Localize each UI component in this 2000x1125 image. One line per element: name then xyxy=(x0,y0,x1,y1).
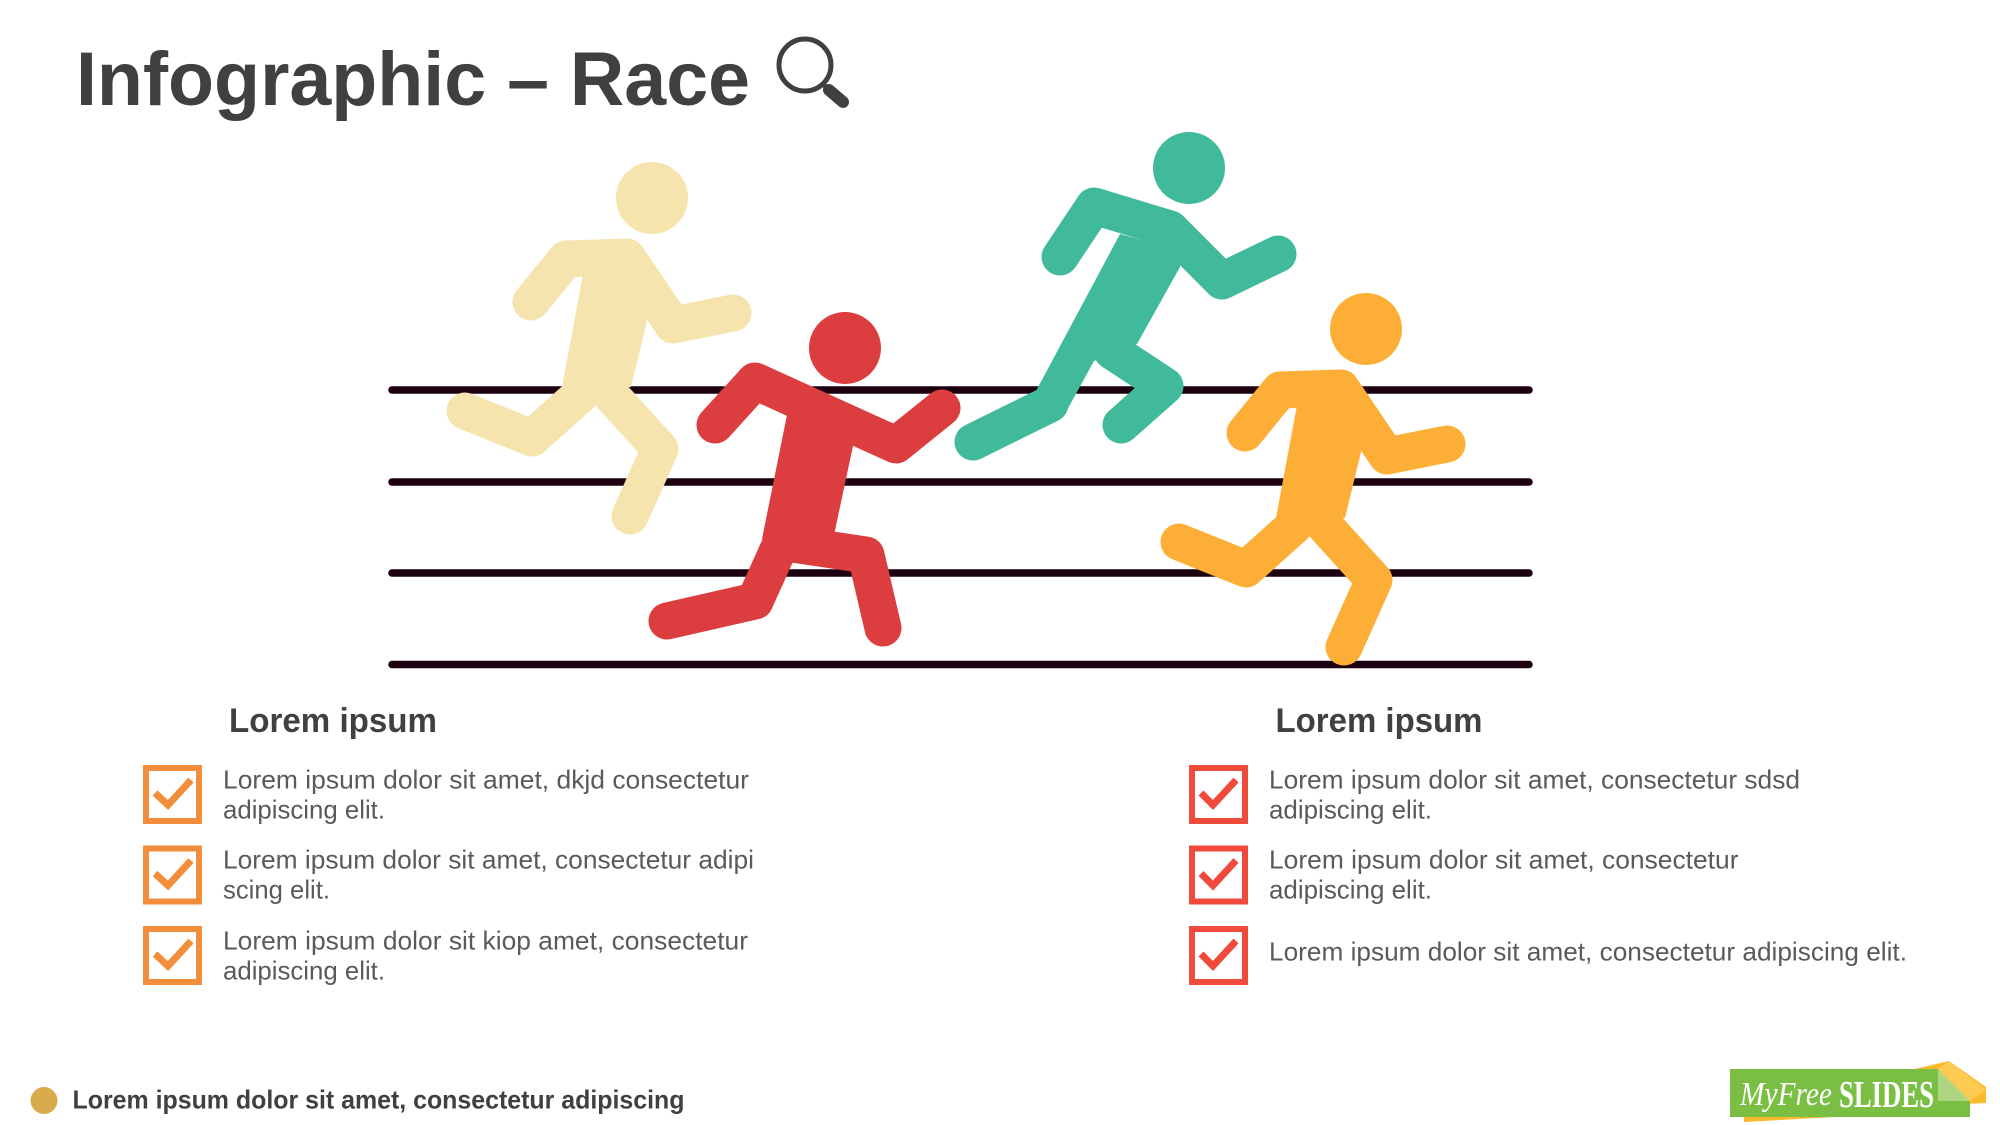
left item 1: adipiscing elit. xyxy=(223,794,385,824)
left item 3 xyxy=(146,926,748,986)
heading: right: Lorem ipsum xyxy=(1276,702,1482,740)
footer bullet dot xyxy=(30,1087,58,1114)
left item 2: Lorem ipsum dolor sit amet, consectetur adipi xyxy=(223,844,754,874)
right item 3: Lorem ipsum dolor sit amet, consectetur adipiscing elit. xyxy=(1269,936,1907,966)
race track lines xyxy=(392,390,1529,664)
title: Infographic – Race xyxy=(76,37,750,122)
runner: green xyxy=(973,132,1278,442)
icon: magnifying glass xyxy=(779,39,843,102)
panel: right list xyxy=(1192,702,1907,982)
left item 2 xyxy=(146,844,754,904)
left item 1: Lorem ipsum dolor sit amet, dkjd consectetur xyxy=(223,764,749,794)
left item 3: Lorem ipsum dolor sit kiop amet, consectetur xyxy=(223,926,748,956)
right item 2 xyxy=(1192,844,1739,904)
left item 2: scing elit. xyxy=(223,874,330,904)
right item 2: Lorem ipsum dolor sit amet, consectetur xyxy=(1269,844,1739,874)
left item 3: adipiscing elit. xyxy=(223,956,385,986)
logo: MyFreeSlides: SLIDES xyxy=(1839,1074,1934,1116)
right item 3 xyxy=(1192,929,1907,982)
runner: beige xyxy=(465,162,733,516)
heading: left: Lorem ipsum xyxy=(229,702,437,740)
runner: red xyxy=(667,312,942,628)
right item 2: adipiscing elit. xyxy=(1269,874,1432,904)
logo: MyFreeSlides: MyFree xyxy=(1739,1076,1832,1113)
right item 1: adipiscing elit. xyxy=(1269,794,1432,824)
right item 1 xyxy=(1192,764,1800,824)
right item 1: Lorem ipsum dolor sit amet, consectetur sdsd xyxy=(1269,764,1800,794)
logo: MyFreeSlides xyxy=(1730,1061,1986,1122)
footer note: Lorem ipsum dolor sit amet, consectetur adipiscing xyxy=(72,1084,684,1114)
runner: orange xyxy=(1179,293,1447,647)
panel: left list xyxy=(146,702,754,986)
left item 1 xyxy=(146,764,749,824)
